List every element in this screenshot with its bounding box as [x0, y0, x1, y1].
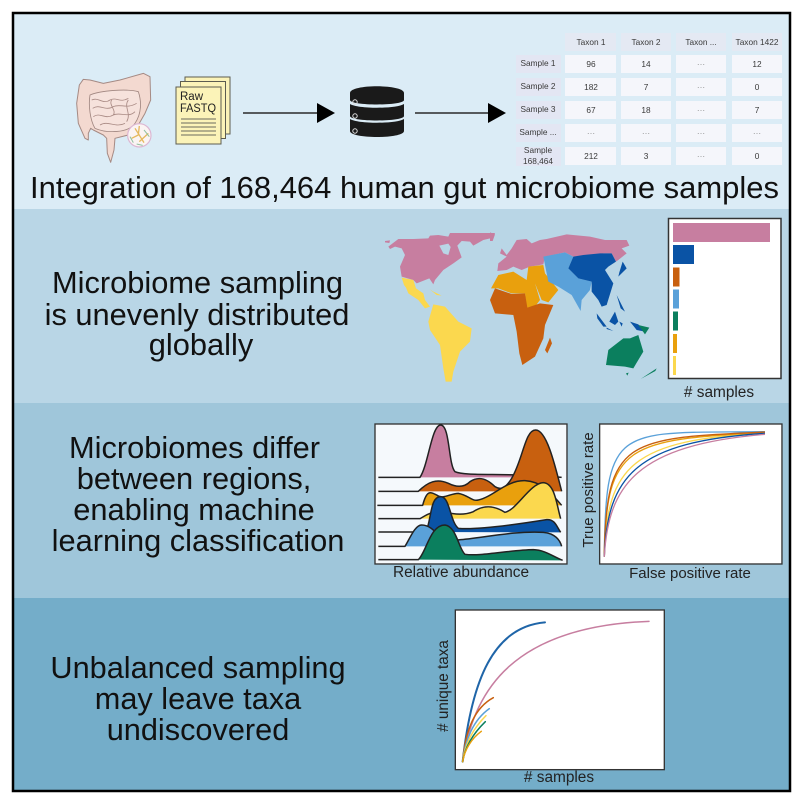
panel: classification [13, 403, 790, 598]
table: sample by taxon counts: Taxon 1 [576, 37, 606, 47]
table: sample by taxon counts: Taxon 2 [631, 37, 661, 47]
table: sample by taxon counts: Sample ... [519, 127, 557, 137]
text: sampling finding: is unevenly distributed [45, 297, 349, 332]
axis label: true positive rate: True positive rate [580, 432, 597, 548]
text: classification finding: enabling machine [73, 492, 315, 527]
text: discovery finding [50, 650, 346, 747]
arrow: files to database [243, 103, 335, 123]
world map: Eurasia, Africa and Oceania [490, 232, 657, 379]
text: discovery finding: Unbalanced sampling [50, 650, 346, 685]
text: classification finding: Microbiomes differ [69, 430, 320, 465]
rarefaction curves [455, 610, 664, 770]
heading: integration: Integration of 168,464 human gut microbiome samples [30, 170, 779, 205]
axis label: samples: # samples [524, 769, 594, 786]
table: sample by taxon counts [516, 33, 782, 166]
text: classification finding: learning classification [52, 523, 344, 558]
table: sample by taxon counts: 7 [755, 105, 760, 115]
table: sample by taxon counts: 212 [584, 151, 598, 161]
axis label: samples: # samples [684, 384, 754, 401]
table: sample by taxon counts: 18 [641, 105, 651, 115]
table: sample by taxon counts: ··· [697, 82, 705, 92]
icon: intestine with microbes [77, 73, 151, 162]
icon: database [350, 86, 404, 137]
text: discovery finding: may leave taxa [95, 681, 302, 716]
table: sample by taxon counts: 0 [755, 151, 760, 161]
ROC curves [600, 424, 782, 564]
table: sample by taxon counts: Sample 2 [520, 81, 556, 91]
table: sample by taxon counts: 3 [644, 151, 649, 161]
axis label: relative abundance: Relative abundance [393, 564, 529, 581]
text: sampling finding: Microbiome sampling [52, 265, 343, 300]
ridge plot [375, 424, 567, 564]
table: sample by taxon counts: 67 [586, 105, 596, 115]
table: sample by taxon counts: Sample 1 [520, 58, 556, 68]
table: sample by taxon counts: ··· [697, 59, 705, 69]
table: sample by taxon counts: Sample 3 [520, 104, 556, 114]
text: sampling finding [45, 265, 349, 362]
table: sample by taxon counts: 96 [586, 59, 596, 69]
axis label: false positive rate: False positive rate [629, 565, 751, 582]
text: classification finding [52, 430, 344, 558]
table: sample by taxon counts: ··· [697, 128, 705, 138]
table: sample by taxon counts: ··· [697, 105, 705, 115]
text: sampling finding: globally [149, 327, 254, 362]
panel: discovery [13, 598, 790, 791]
text: discovery finding: undiscovered [107, 712, 289, 747]
table: sample by taxon counts: Taxon ... [685, 37, 717, 47]
text: classification finding: between regions, [77, 461, 311, 496]
icon: raw FASTQ files [176, 77, 230, 144]
table: sample by taxon counts: ··· [587, 128, 595, 138]
table: sample by taxon counts: 182 [584, 82, 598, 92]
panel: sampling [13, 209, 790, 403]
world map: Americas [385, 233, 495, 382]
table: sample by taxon counts: 168,464 [523, 156, 553, 166]
icon: raw FASTQ files: FASTQ [180, 103, 216, 115]
table: sample by taxon counts: ··· [642, 128, 650, 138]
table: sample by taxon counts: Taxon 1422 [736, 37, 779, 47]
icon: raw FASTQ files: Raw [180, 91, 204, 103]
table: sample by taxon counts: ··· [753, 128, 761, 138]
table: sample by taxon counts: ··· [697, 151, 705, 161]
arrow: database to table [415, 103, 506, 123]
table: sample by taxon counts: Sample [524, 145, 552, 155]
table: sample by taxon counts: 0 [755, 82, 760, 92]
table: sample by taxon counts: 12 [752, 59, 762, 69]
table: sample by taxon counts: 14 [641, 59, 651, 69]
bar chart: samples per region [668, 218, 781, 378]
axis label: unique taxa: # unique taxa [435, 640, 452, 732]
table: sample by taxon counts: 7 [644, 82, 649, 92]
panel: integration [13, 13, 790, 209]
